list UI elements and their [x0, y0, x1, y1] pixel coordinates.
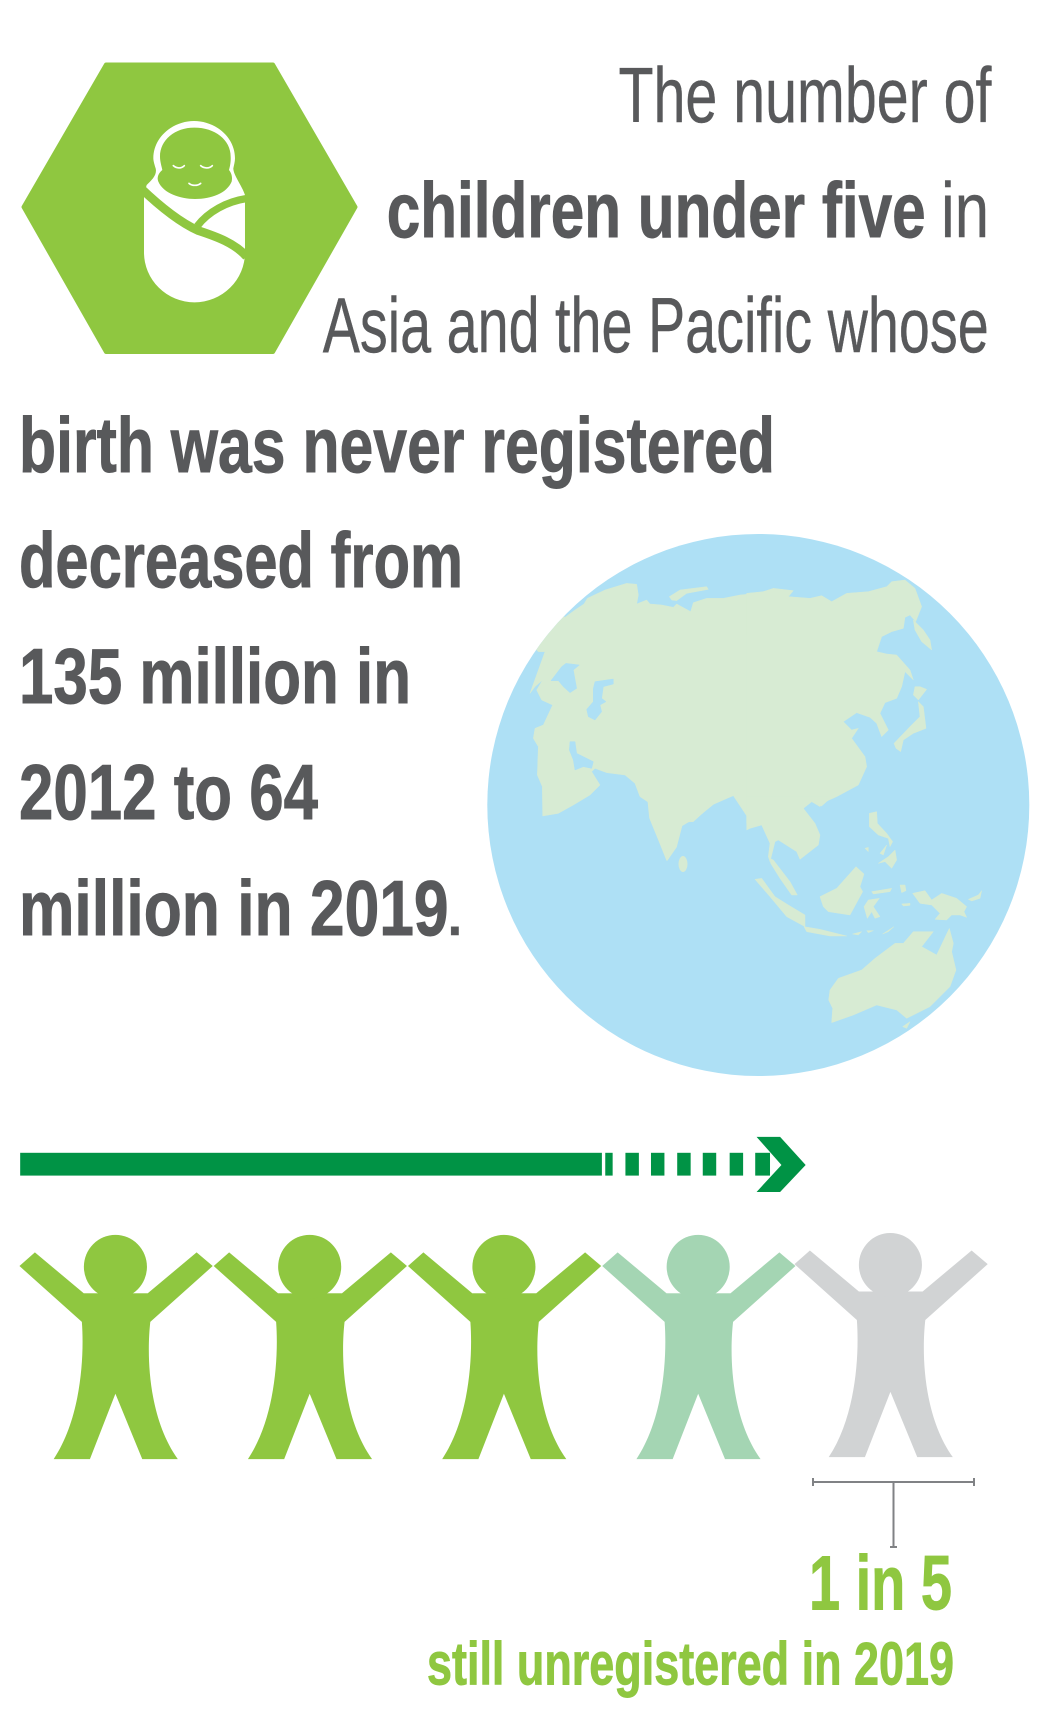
heading text block: decreased from	[19, 516, 463, 604]
heading text block: .	[444, 864, 466, 952]
person 4	[602, 1235, 795, 1459]
heading text block	[19, 51, 992, 952]
person 3	[408, 1235, 601, 1459]
person 2	[214, 1235, 407, 1459]
person 5	[794, 1233, 988, 1457]
callout: 1 in 5 still unregistered	[427, 1540, 954, 1698]
callout: 1 in 5 still unregistered: 1 in 5	[809, 1540, 952, 1626]
heading text block: million in 2019	[19, 864, 449, 952]
globe: Asia and the Pacific	[487, 534, 1029, 1076]
heading text block: 2012 to 64	[19, 748, 318, 836]
bracket pointing to 1 in 5	[813, 1478, 974, 1547]
icon: green hexagon with swaddled baby	[24, 64, 356, 352]
person 1	[19, 1235, 213, 1459]
heading text block: in	[941, 166, 989, 254]
heading text block: 135 million in	[19, 632, 411, 720]
heading text block: birth was never registered	[19, 401, 775, 489]
arrow: solid then dashed progress bar	[20, 1137, 806, 1192]
people row: one in five unregistered	[19, 1233, 988, 1459]
